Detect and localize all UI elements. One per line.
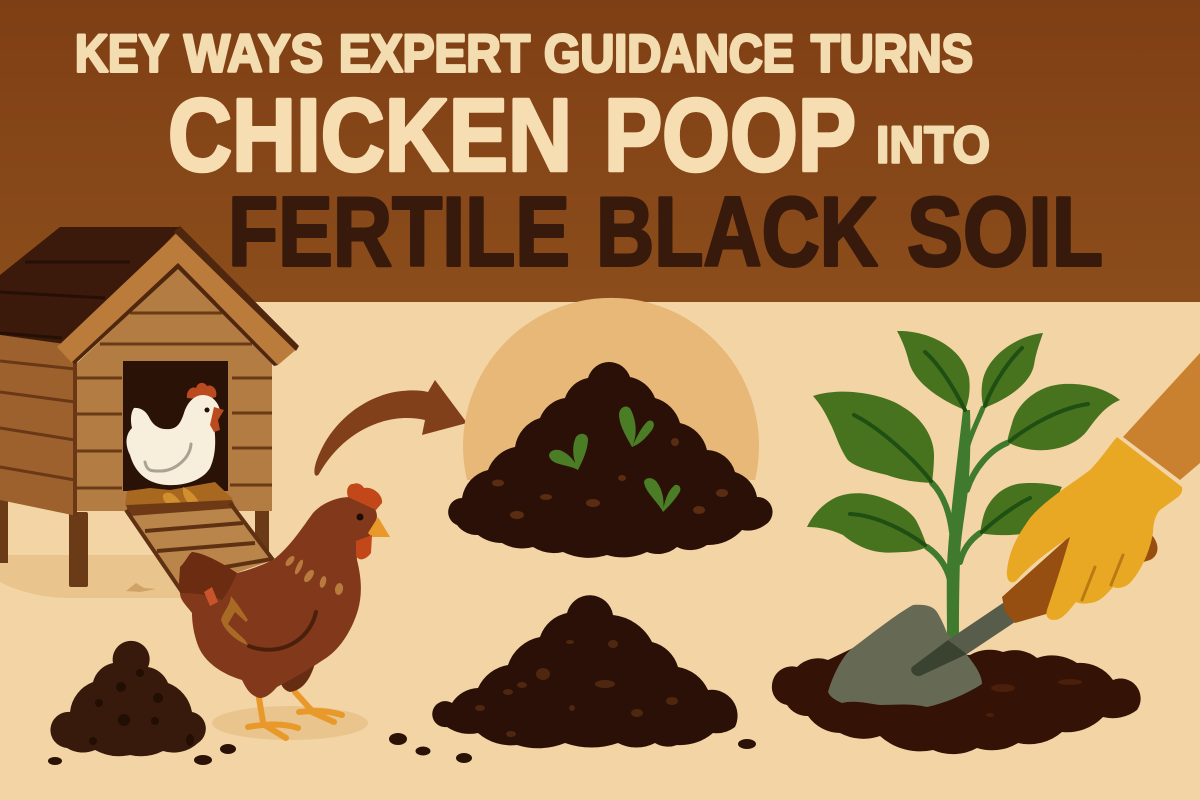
- upper compost pile: [448, 362, 773, 558]
- title line 3: SOIL: [907, 176, 1103, 286]
- small poop pile: [50, 641, 206, 756]
- title line 2: [168, 78, 856, 192]
- trowel: [828, 603, 1015, 707]
- curved arrow: [314, 380, 467, 476]
- plant branches: [927, 408, 1007, 580]
- hen eye: [356, 514, 364, 520]
- compost flecks: [492, 438, 728, 519]
- hen eye: [204, 408, 210, 412]
- title line 1: EXPERT: [339, 24, 530, 84]
- soil highlights: [986, 679, 1082, 717]
- ramp: [126, 500, 273, 592]
- leaf top left: [897, 331, 970, 410]
- gardener arm: [1123, 353, 1200, 480]
- leaf upper left: [813, 392, 934, 483]
- straw nest: [125, 482, 233, 509]
- hen wing: [145, 444, 191, 471]
- pile flecks: [475, 640, 678, 737]
- seedling 3: [644, 478, 680, 512]
- trowel neck dark: [911, 640, 967, 676]
- ground debris: [126, 583, 156, 592]
- roof trim dark edge: [72, 226, 299, 366]
- coop side wall: [0, 335, 77, 516]
- hen shadow: [212, 706, 368, 740]
- roof trim: [57, 233, 298, 365]
- title line 3: FERTILE: [228, 176, 570, 286]
- seedling 1: [549, 434, 588, 470]
- dark roof: [0, 227, 181, 345]
- hen legs and feet: [248, 692, 342, 738]
- soil mound: [772, 648, 1141, 754]
- hen comb: [347, 483, 382, 510]
- leaf top right: [982, 333, 1043, 408]
- chicken coop: [0, 226, 299, 598]
- wing line: [249, 612, 316, 650]
- brown hen: [179, 483, 390, 740]
- title line 1: [75, 24, 973, 84]
- wing marking: [221, 596, 248, 645]
- header band: [0, 0, 1200, 302]
- title line 1: WAYS: [184, 24, 323, 84]
- yellow glove: [1007, 437, 1182, 620]
- plant stem: [947, 410, 970, 640]
- far thigh: [280, 660, 316, 692]
- lower compost pile: [432, 595, 738, 748]
- hen beak: [368, 517, 390, 537]
- coop shadow: [0, 555, 185, 598]
- roof shingles: [0, 262, 130, 338]
- front wall planks: [77, 313, 272, 488]
- finger creases: [1082, 555, 1123, 600]
- title line 2: CHICKEN: [168, 78, 572, 192]
- seedling 2: [619, 407, 654, 447]
- pile specks: [89, 669, 194, 746]
- trowel blade: [828, 605, 982, 707]
- trowel shaft: [948, 603, 1015, 654]
- front wall: [77, 268, 272, 511]
- red feather: [204, 587, 218, 606]
- title line 3: BLACK: [596, 176, 878, 286]
- title line 1: TURNS: [811, 24, 973, 84]
- side wall planks: [0, 360, 75, 516]
- leaf lower left: [807, 493, 927, 553]
- planted seedling: [807, 331, 1120, 640]
- title word: into: INTO: [876, 117, 990, 175]
- hen comb: [187, 383, 216, 400]
- leaf veins: [850, 348, 1088, 545]
- neck feather marks: [284, 554, 344, 596]
- hen body: [126, 395, 220, 485]
- droppings: [48, 733, 756, 765]
- title: [75, 24, 1103, 286]
- title line 1: KEY: [75, 24, 169, 84]
- title line 3: [228, 176, 1103, 286]
- hen wattle: [210, 407, 224, 432]
- title line 2: POOP: [604, 78, 856, 192]
- hen wattle: [356, 535, 372, 559]
- white hen: [126, 383, 224, 485]
- trowel handle: [1002, 520, 1158, 623]
- leaf lower right: [980, 483, 1062, 535]
- title line 1: GUIDANCE: [544, 24, 794, 84]
- coop door: [123, 361, 228, 491]
- hen tail shade: [179, 552, 237, 600]
- hen body: [179, 497, 377, 698]
- sun circle: [463, 298, 759, 480]
- coop legs: [0, 498, 269, 587]
- leaf upper right: [1007, 384, 1120, 450]
